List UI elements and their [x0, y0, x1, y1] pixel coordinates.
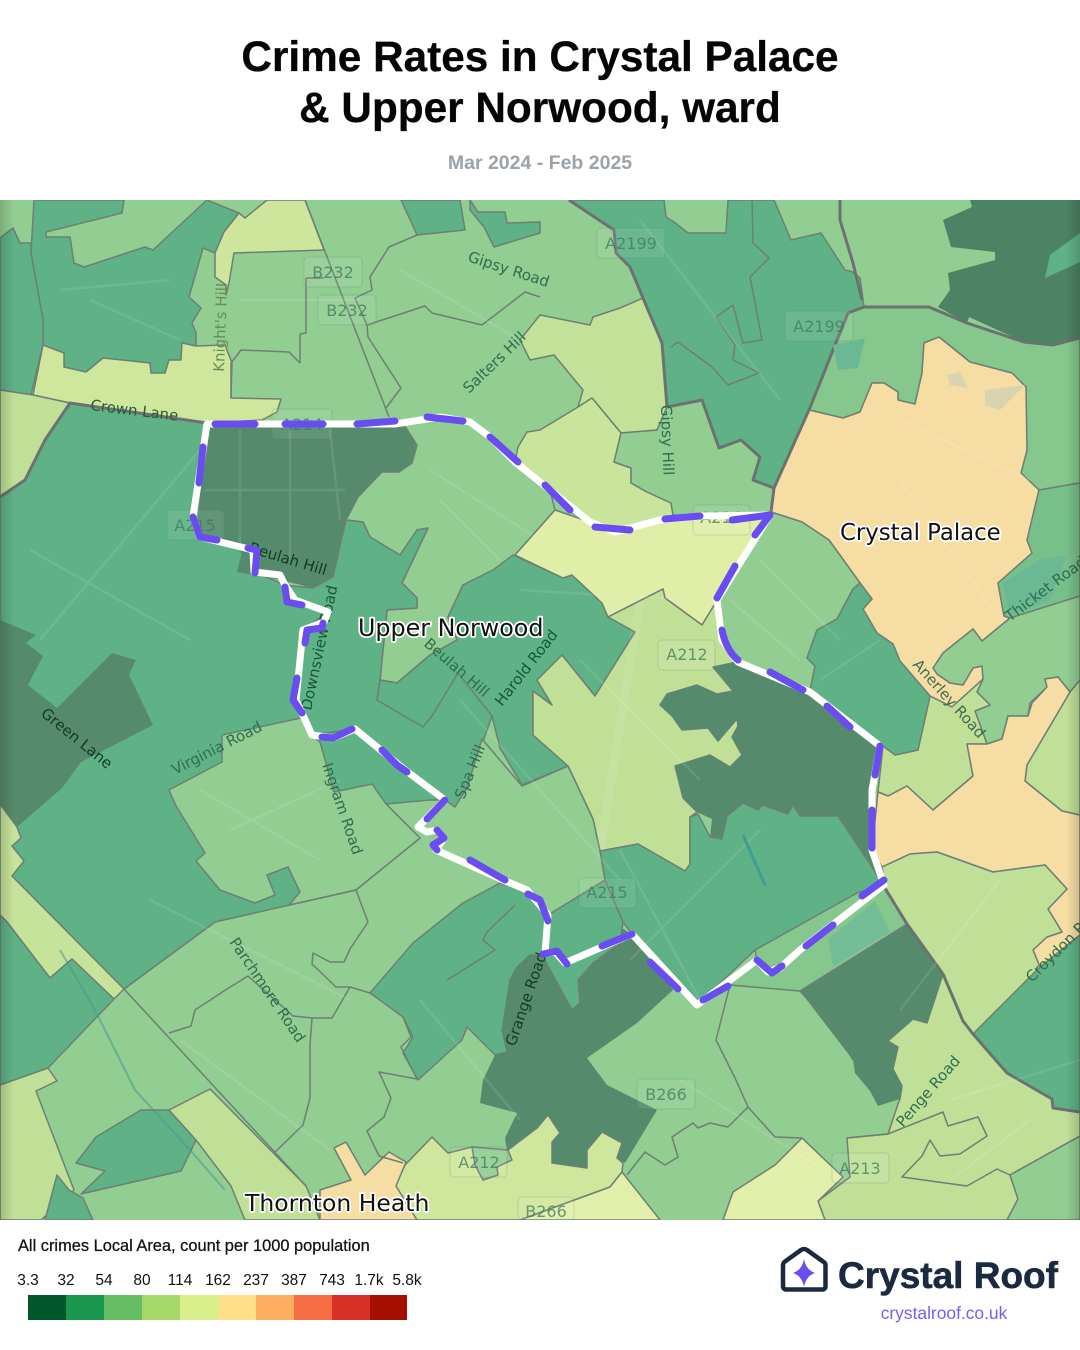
- legend scale: 114: [168, 1272, 193, 1289]
- street names: Anerley Road: [909, 656, 989, 742]
- street names: Harold Road: [491, 626, 562, 709]
- road shield labels: B266: [645, 1085, 687, 1104]
- street names: Gipsy Road: [466, 248, 552, 291]
- wordmark: Crystal Roof: [838, 1255, 1058, 1296]
- road shield labels: A2199: [793, 317, 845, 336]
- street names: Knight's Hill: [210, 283, 231, 372]
- street names: Gipsy Hill: [657, 405, 677, 476]
- legend scale: 54: [95, 1272, 113, 1289]
- street names: Penge Road: [892, 1052, 964, 1131]
- ward boundary: [193, 417, 884, 1005]
- borough boundary: [0, 200, 1080, 1112]
- neighbourhood areas: [0, 200, 1080, 1220]
- legend scale: 5.8k: [392, 1272, 422, 1289]
- street names: Beulah Hill: [420, 634, 493, 701]
- icon: house with sparkle: [780, 1246, 828, 1292]
- place names: Crystal Palace: [840, 520, 1001, 546]
- legend scale: 237: [243, 1272, 269, 1289]
- place names: [244, 520, 1001, 1217]
- street names: Salters Hill: [459, 328, 530, 397]
- legend scale: 387: [281, 1272, 307, 1289]
- legend scale: 743: [319, 1272, 345, 1289]
- place names: Thornton Heath: [244, 1189, 429, 1217]
- legend scale: 3.3: [17, 1272, 39, 1289]
- street names: Ingram Road: [318, 760, 366, 857]
- legend title: All crimes Local Area, count per 1000 population: [18, 1237, 370, 1255]
- water features: [833, 338, 865, 370]
- map edge shading: [0, 200, 1080, 1220]
- street names: Virginia Road: [169, 718, 265, 779]
- road shield labels: B232: [326, 301, 368, 320]
- street names: Spa Hill: [451, 742, 489, 801]
- legend scale: 1.7k: [354, 1272, 384, 1289]
- road shield labels: A215: [174, 516, 216, 535]
- logo: Crystal Roof: [780, 1246, 1058, 1323]
- street names: Green Lane: [37, 704, 116, 773]
- title: [241, 33, 839, 132]
- street names: Grange Road: [502, 950, 551, 1048]
- street names: Beulah Hill: [247, 539, 329, 579]
- road shield labels: [167, 228, 889, 1221]
- road shield labels: A212: [458, 1153, 500, 1172]
- legend scale: [17, 1272, 422, 1320]
- street names: [37, 248, 1080, 1131]
- legend: [17, 1237, 422, 1320]
- road shield labels: A214: [281, 415, 323, 434]
- place names: Upper Norwood: [358, 614, 543, 642]
- road shield labels: A2199: [605, 234, 657, 253]
- street names: Parchmore Road: [226, 934, 309, 1046]
- legend scale: 162: [205, 1272, 231, 1289]
- road shield labels: A215: [586, 883, 628, 902]
- faint road network: [30, 220, 1080, 1180]
- choropleth map: [0, 200, 1080, 1220]
- road shield labels: A214: [700, 508, 742, 527]
- road shield labels: B232: [312, 263, 354, 282]
- street names: Crown Lane: [90, 396, 179, 425]
- title: Crime Rates in Crystal Palace: [241, 33, 839, 80]
- legend scale: 80: [133, 1272, 151, 1289]
- road shield labels: A213: [839, 1159, 881, 1178]
- title: & Upper Norwood, ward: [299, 84, 781, 131]
- street names: Downsview Road: [297, 584, 341, 712]
- website: crystalroof.co.uk: [881, 1303, 1007, 1323]
- road shield labels: A212: [666, 645, 708, 664]
- area boundary lines: [124, 200, 1010, 1186]
- subtitle: date range: Mar 2024 - Feb 2025: [448, 152, 632, 174]
- legend scale: 32: [57, 1272, 75, 1289]
